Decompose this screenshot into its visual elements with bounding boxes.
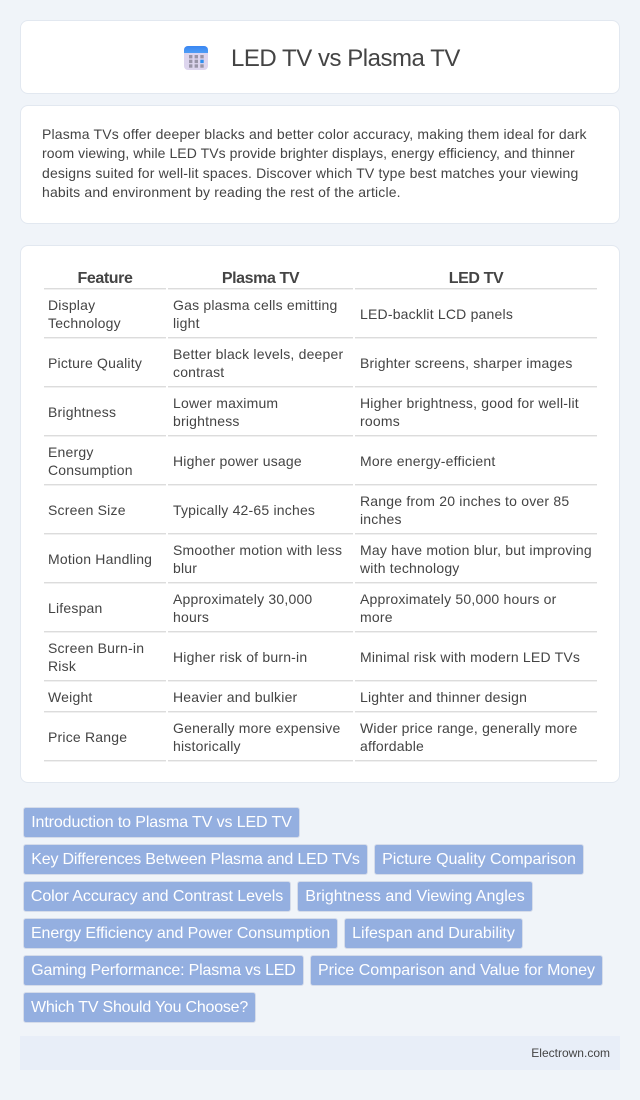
table rows: Wider price range, generally more [360,720,577,736]
title: LED TV vs Plasma TV [231,45,460,72]
tag [23,844,368,875]
table rows: Technology [48,315,121,331]
tag: Color Accuracy and Contrast Levels [31,888,283,905]
table rows: Brightness [48,404,116,420]
table rows: brightness [173,413,240,429]
tag [23,881,291,912]
tag [310,955,603,986]
tag: Brightness and Viewing Angles [305,888,525,905]
table rows: Price Range [48,729,127,745]
table rows: Motion Handling [48,551,152,567]
intro paragraph: designs suited for well-lit spaces. Discover which TV type best matches your viewing [42,165,578,181]
tag [23,992,256,1023]
tag: Introduction to Plasma TV vs LED TV [31,814,292,831]
intro paragraph: room viewing, while LED TVs provide brighter displays, energy efficiency, and thinner [42,145,575,161]
table rows: Consumption [48,462,133,478]
tag [23,955,304,986]
intro paragraph [42,126,587,200]
table rows: Display [48,297,95,313]
intro text panel [20,105,620,224]
table rows: Smoother motion with less [173,542,342,558]
icon: calendar [184,46,208,70]
tag: Price Comparison and Value for Money [318,962,595,979]
footer credit: Electrown.com [531,1046,610,1060]
table rows: more [360,609,393,625]
tag: Which TV Should You Choose? [31,999,248,1016]
table rows: Weight [48,689,93,705]
table rows: historically [173,738,241,754]
table rows: Brighter screens, sharper images [360,355,573,371]
table rows: rooms [360,413,400,429]
tag: Energy Efficiency and Power Consumption [31,925,330,942]
table rows: Range from 20 inches to over 85 [360,493,569,509]
intro paragraph: habits and environment by reading the rest of the article. [42,184,401,200]
tag: Gaming Performance: Plasma vs LED [31,962,296,979]
column headers [78,270,504,287]
table rows: Generally more expensive [173,720,340,736]
table rows: Minimal risk with modern LED TVs [360,649,580,665]
tag [297,881,533,912]
table rows: May have motion blur, but improving [360,542,592,558]
column headers: LED TV [449,270,503,287]
table rows: blur [173,560,197,576]
tag: Picture Quality Comparison [382,851,576,868]
table rows: Higher risk of burn-in [173,649,307,665]
table rows: More energy-efficient [360,453,495,469]
table rows: Approximately 30,000 [173,591,312,607]
table rows: with technology [360,560,460,576]
tag [374,844,584,875]
table rows: Lifespan [48,600,103,616]
table rows [44,288,597,762]
section tags [23,807,603,1023]
tag [23,807,300,838]
comparison table panel [20,245,620,783]
table rows: LED-backlit LCD panels [360,306,513,322]
table rows: Screen Burn-in [48,640,144,656]
table rows: hours [173,609,209,625]
table rows: Lower maximum [173,395,278,411]
table rows: Approximately 50,000 hours or [360,591,556,607]
table rows: Better black levels, deeper [173,346,343,362]
table rows: inches [360,511,402,527]
table rows: light [173,315,200,331]
tag [23,918,338,949]
table rows: Risk [48,658,76,674]
tag: Lifespan and Durability [352,925,515,942]
tag: Key Differences Between Plasma and LED TVs [31,851,360,868]
table rows: Picture Quality [48,355,142,371]
table rows: Typically 42-65 inches [173,502,315,518]
table rows: Lighter and thinner design [360,689,527,705]
table rows: affordable [360,738,424,754]
table rows: Screen Size [48,502,126,518]
table rows: contrast [173,364,224,380]
tag [344,918,523,949]
column headers: Plasma TV [222,270,299,287]
table rows: Energy [48,444,94,460]
header card [20,20,620,94]
table rows: Gas plasma cells emitting [173,297,338,313]
column headers: Feature [78,270,132,287]
intro paragraph: Plasma TVs offer deeper blacks and better color accuracy, making them ideal for dark [42,126,587,142]
footer [20,1036,620,1070]
table rows: Heavier and bulkier [173,689,297,705]
table rows: Higher power usage [173,453,302,469]
table rows: Higher brightness, good for well-lit [360,395,579,411]
